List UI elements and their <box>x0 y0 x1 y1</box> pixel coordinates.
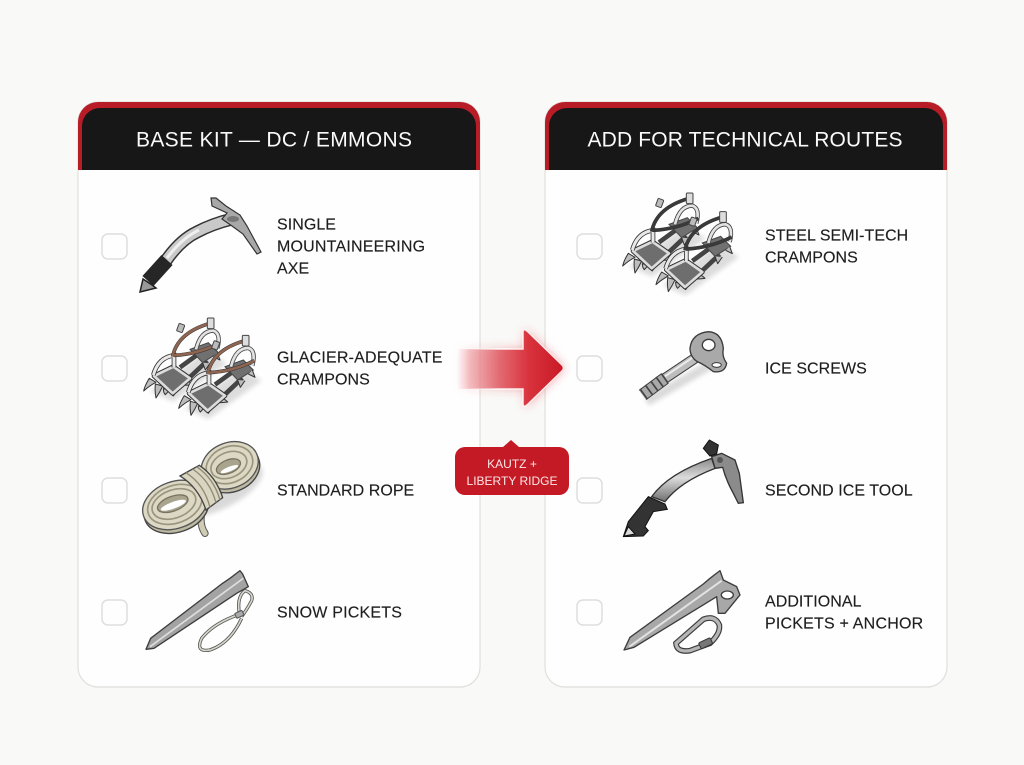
label: SNOW PICKETS <box>277 604 402 622</box>
icon: brown strap crampons <box>144 318 262 419</box>
callout: kautz + liberty ridge <box>455 440 569 495</box>
row: single mountaineering axe <box>102 198 425 292</box>
icon: ice tool <box>623 440 743 537</box>
label: SECOND ICE TOOL <box>765 482 913 500</box>
icon: picket and carabiner <box>624 571 740 651</box>
heading: base kit <box>78 102 480 170</box>
icon: ice axe <box>140 198 261 292</box>
row: glacier-adequate crampons <box>102 318 443 419</box>
row: standard rope <box>102 433 414 542</box>
row: second ice tool <box>577 440 913 537</box>
heading: technical routes: ADD FOR TECHNICAL ROUTES <box>588 128 902 152</box>
label: STEEL SEMI-TECH <box>765 228 908 244</box>
row: glacier-adequate crampons: CRAMPONS <box>277 372 370 388</box>
panel: technical routes <box>545 102 947 687</box>
row: steel semi-tech crampons <box>577 193 908 295</box>
row: single mountaineering axe: MOUNTAINEERING <box>277 238 425 256</box>
row: additional pickets + anchor <box>577 571 923 651</box>
row: single mountaineering axe: AXE <box>277 260 309 278</box>
icon: ice screw <box>640 332 727 402</box>
panel: base kit <box>78 102 480 687</box>
heading: technical routes <box>545 102 947 170</box>
heading: base kit: BASE KIT — DC / EMMONS <box>136 128 412 152</box>
label: STANDARD ROPE <box>277 482 414 500</box>
arrow: base kit to technical <box>457 330 564 407</box>
label: ADDITIONAL <box>765 594 862 610</box>
callout: kautz + liberty ridge: KAUTZ + <box>487 457 537 471</box>
label: SINGLE <box>277 216 336 234</box>
row: steel semi-tech crampons: CRAMPONS <box>765 250 858 266</box>
row: snow pickets <box>102 571 402 650</box>
icon: snow picket with sling <box>146 571 252 650</box>
icon: coiled rope <box>136 433 270 542</box>
icon: steel crampons <box>623 193 739 295</box>
row: ice screws <box>577 332 867 402</box>
callout: kautz + liberty ridge: LIBERTY RIDGE <box>467 474 557 488</box>
label: ICE SCREWS <box>765 360 867 378</box>
label: GLACIER-ADEQUATE <box>277 350 443 366</box>
row: additional pickets + anchor: PICKETS + ANCHOR <box>765 616 923 632</box>
